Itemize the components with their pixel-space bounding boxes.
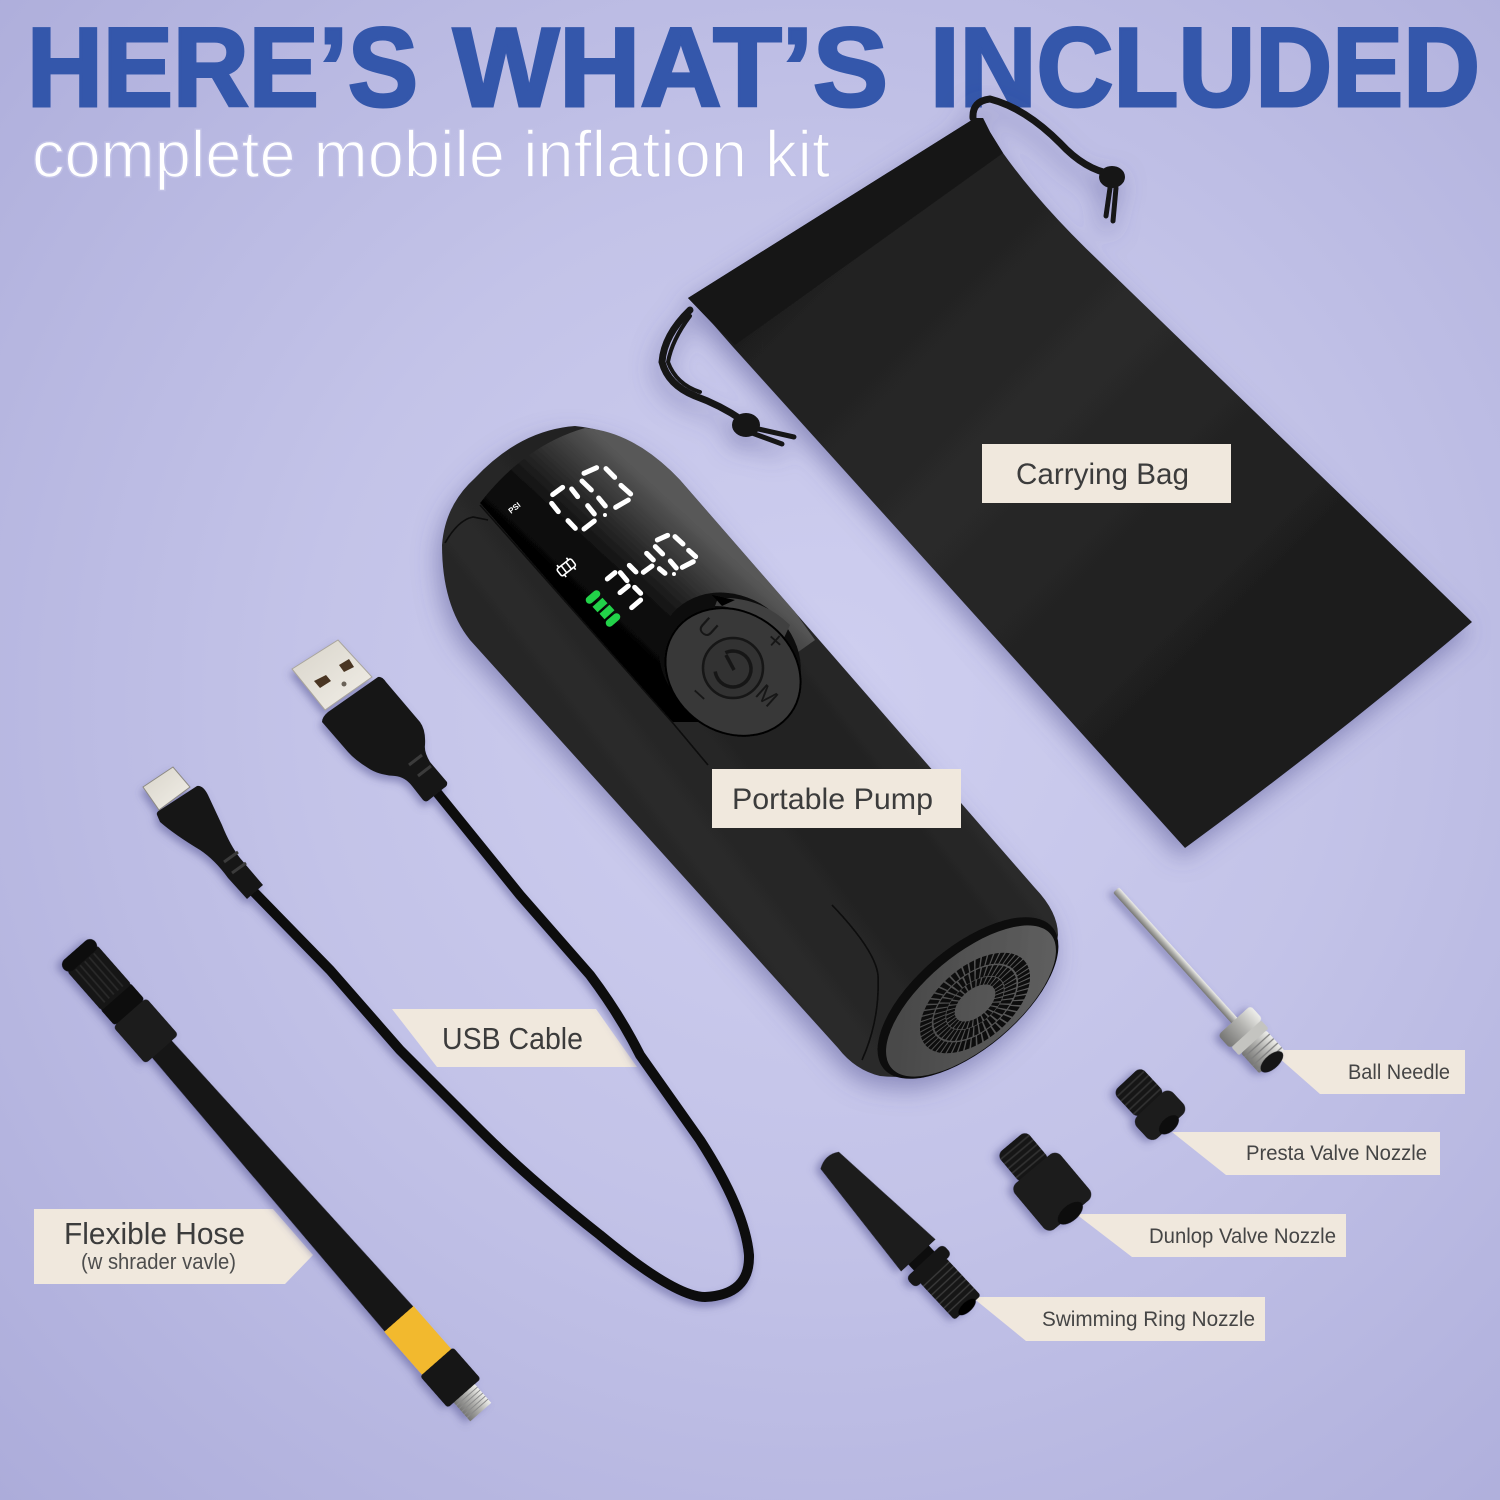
pump fan end [851,888,1085,1108]
hose metal tip [454,1384,491,1421]
label: dunlop valve nozzle: Dunlop Valve Nozzle [1149,1225,1336,1248]
pump seam lines [445,505,878,1060]
swimming ring nozzle [809,1140,989,1328]
pump control dial: − [684,678,715,711]
pump body [442,426,1058,1077]
hose knurled head [59,936,145,1026]
subtitle: complete mobile inflation kit [32,117,830,191]
label: ball needle [1270,1050,1465,1094]
pump control dial: + [760,624,791,657]
dunlop valve nozzle [988,1123,1098,1239]
label: presta valve nozzle [1172,1132,1440,1175]
pump control dial: U [692,612,723,644]
title: HERE’S [27,5,418,130]
title: WHAT’S [453,5,888,130]
title: INCLUDED [930,5,1480,130]
bag body [688,118,1472,848]
hose yellow band [384,1306,451,1375]
label: flexible hose [34,1209,313,1284]
pump display panel [480,428,815,722]
label: usb cable [392,1009,637,1067]
label: portable pump: Portable Pump [732,783,933,816]
presta valve nozzle [1108,1062,1192,1147]
hose tube [146,1034,413,1331]
usb-c plug [143,767,263,899]
pump battery indicator [590,594,616,623]
pump display readout [552,468,696,608]
portable pump [442,426,1085,1108]
hose top collar [113,998,179,1064]
label: portable pump [712,769,961,828]
label: ball needle: Ball Needle [1348,1061,1450,1084]
hose end collar [420,1347,481,1408]
label: presta valve nozzle: Presta Valve Nozzle [1246,1142,1427,1165]
label: swimming ring nozzle: Swimming Ring Nozzle [1042,1308,1255,1331]
label: carrying bag: Carrying Bag [1016,458,1189,491]
carrying bag [662,99,1472,848]
label: usb cable: USB Cable [442,1021,583,1056]
pump control dial [633,565,827,762]
bag drawstring right [973,99,1124,221]
pump control dial: M [750,679,783,713]
label: swimming ring nozzle [972,1297,1265,1341]
flexible hose [58,936,497,1427]
label: flexible hose: (w shrader vavle) [81,1249,236,1274]
cable wire [252,790,749,1297]
bag hem [688,118,1003,345]
pump car icon [555,556,578,579]
label: flexible hose: Flexible Hose [64,1216,245,1251]
label: carrying bag [982,444,1231,503]
pump PSI label: PSI [507,501,522,516]
usb cable [143,640,749,1297]
usb-a plug [292,640,447,802]
title [27,5,1480,130]
ball needle [1100,875,1293,1082]
bag drawstring left [662,310,794,444]
label: dunlop valve nozzle [1076,1214,1346,1257]
